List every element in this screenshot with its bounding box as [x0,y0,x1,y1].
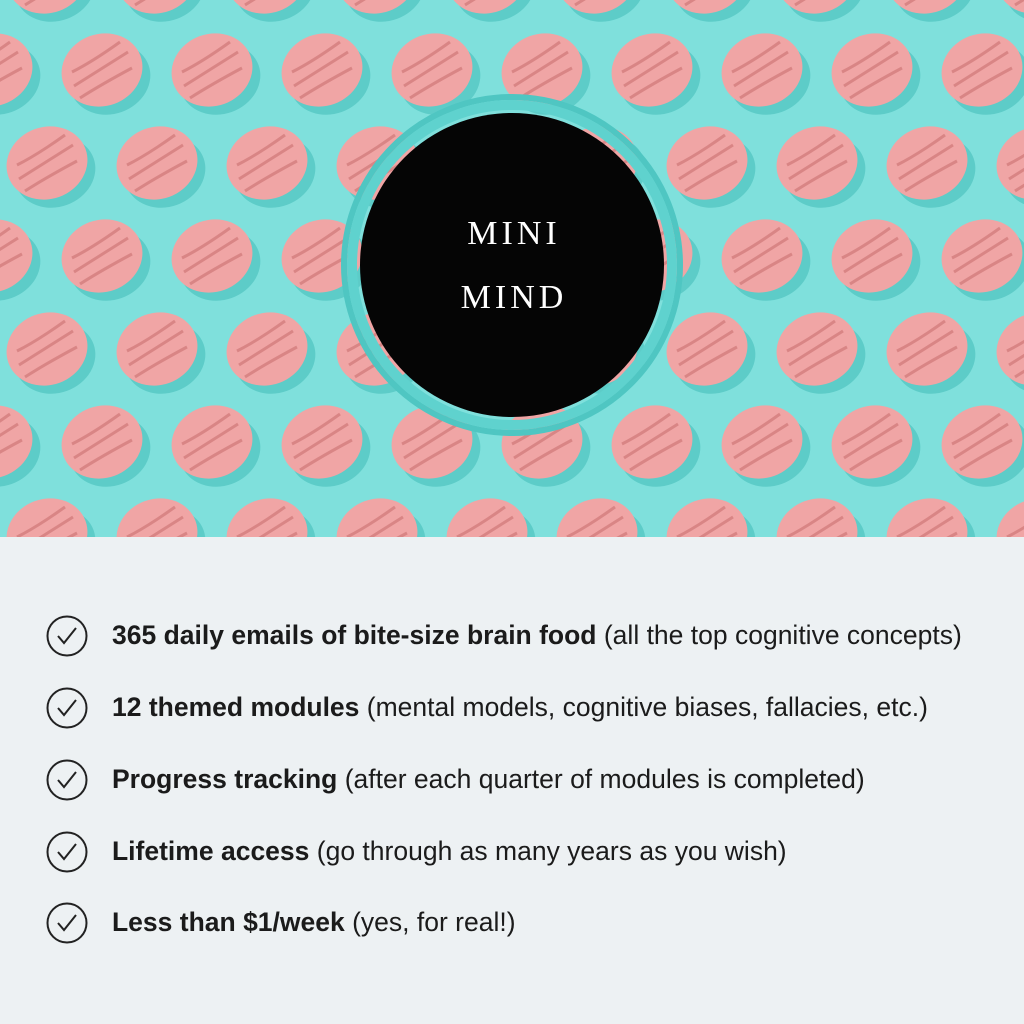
logo text: MINI [467,215,561,252]
item 2 [46,688,928,728]
item 3: Progress tracking (after each quarter of modules is completed) [112,764,865,794]
item 4 [46,832,787,872]
logo text [461,215,567,316]
item 4: Lifetime access (go through as many years as you wish) [112,836,787,866]
item 1 [46,616,962,656]
feature list panel [0,537,1024,1024]
item 5 [46,902,516,944]
hero: brain pattern background with logo [0,0,1024,537]
logo text: MIND [461,279,567,316]
item 1: 365 daily emails of bite-size brain food (all the top cognitive concepts) [112,620,962,650]
item 5: Less than $1/week (yes, for real!) [112,907,516,937]
item 3 [46,760,865,800]
item 2: 12 themed modules (mental models, cognitive biases, fallacies, etc.) [112,692,928,722]
logo circle [344,97,680,433]
